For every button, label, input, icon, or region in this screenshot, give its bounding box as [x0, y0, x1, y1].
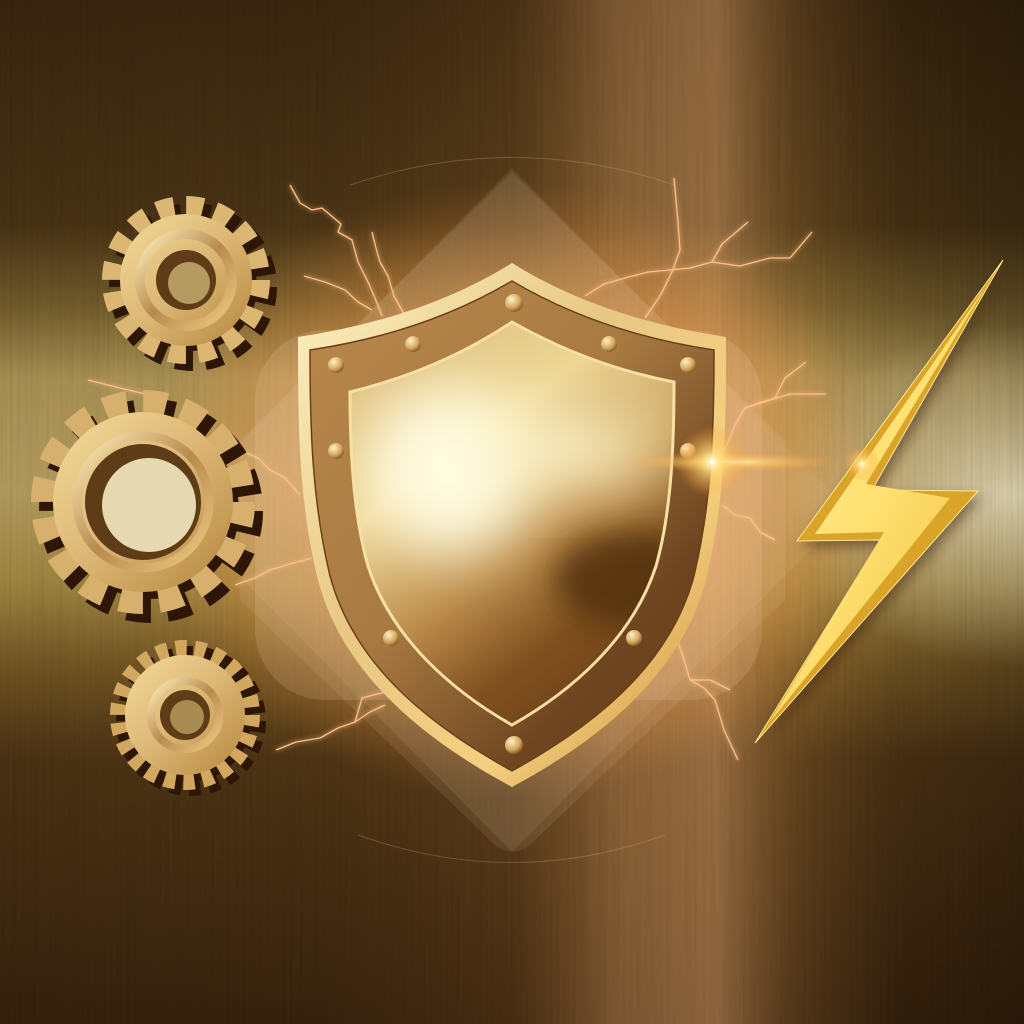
gear: bottom — [119, 649, 257, 787]
electric arcs — [88, 178, 826, 760]
shield outer frame — [298, 263, 726, 787]
gear: middle — [44, 403, 250, 610]
central orange glow — [142, 180, 882, 800]
shield inner plate — [352, 324, 673, 723]
bolt shadow — [759, 266, 1007, 749]
gear middle shadow — [52, 412, 250, 610]
lightning bolt — [755, 260, 1007, 749]
backdrop: translucent diamond and hexagon — [174, 158, 850, 862]
shield rivets — [328, 294, 696, 754]
lens flares — [620, 426, 880, 498]
bolt highlight — [770, 285, 987, 722]
gear top shadow — [119, 213, 267, 361]
shield — [298, 263, 726, 787]
shield metal band — [310, 281, 714, 771]
shield plate rim — [350, 322, 674, 725]
gear bottom shadow — [125, 655, 257, 787]
gear: top — [112, 206, 267, 361]
